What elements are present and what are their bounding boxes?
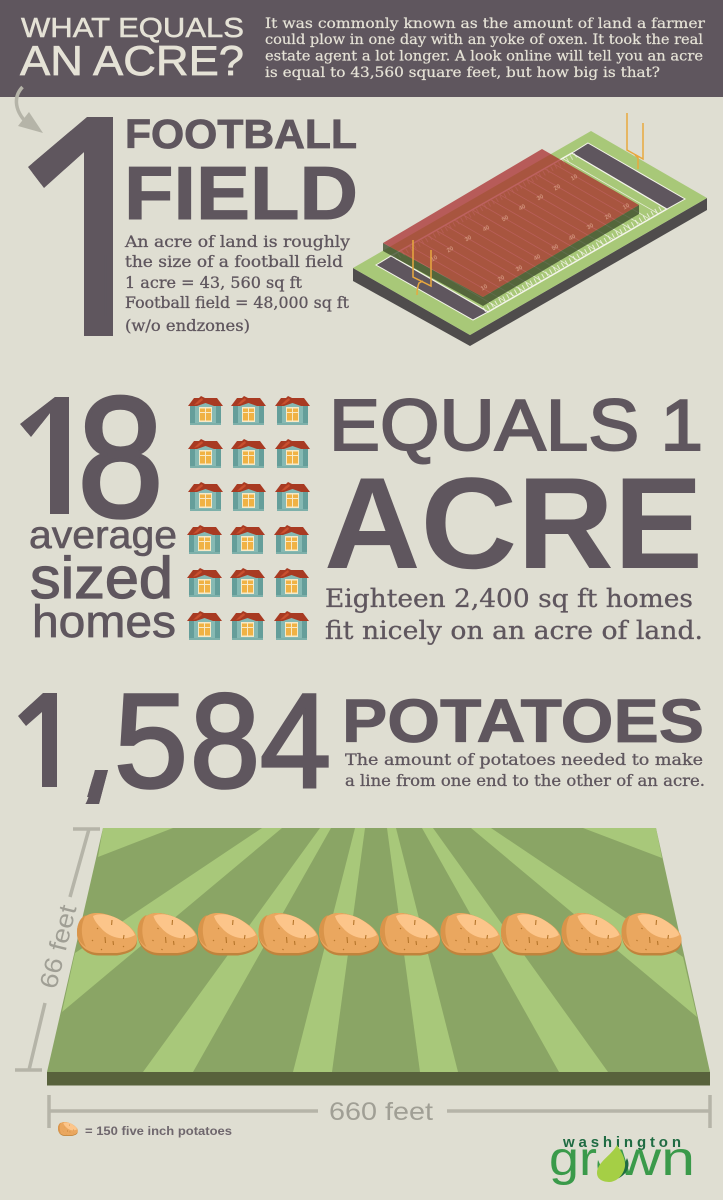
intro paragraph [265,16,706,81]
intro paragraph: is equal to 43,560 square feet, but how big is that? [265,65,660,81]
red acre overlay [383,149,639,306]
football field description [124,232,350,335]
big number 18: 1 [12,359,108,553]
dimension: 66 feet [15,829,100,1070]
football field description: Football field = 48,000 sq ft [125,293,350,312]
potatoes description: The amount of potatoes needed to make [345,751,703,769]
legend: potato key [58,1122,232,1138]
football field description: An acre of land is roughly [124,232,350,251]
big number 18: 8 [78,362,164,553]
yard numbers: 30 [515,265,524,273]
yard numbers: 30 [536,194,545,202]
illustration: crop field with stripes [47,828,710,1086]
heading: equals 1 acre: EQUALS 1 [329,386,703,466]
yard numbers: 40 [518,204,527,212]
yard numbers: 50 [551,244,560,252]
homes description [325,584,703,645]
heading: football field [124,111,358,235]
header band [0,0,723,97]
logo: washington grown: wn [616,1133,695,1186]
yard numbers: 10 [430,255,439,263]
label: average sized homes: homes [32,596,176,647]
intro paragraph: estate agent a lot longer. A look online will tell you an acre [265,48,703,64]
title: what equals an acre [20,12,244,84]
big number 1,584: 8 [190,667,260,816]
yard numbers: 30 [586,223,595,231]
potatoes description: a line from one end to the other of an acre. [345,772,705,790]
football field description: (w/o endzones) [125,316,250,335]
endzones [376,143,685,320]
logo: washington grown: gr [549,1133,597,1186]
yard numbers: 20 [553,184,562,192]
yard numbers: 10 [570,174,579,182]
title: what equals an acre: AN ACRE? [20,37,244,84]
yard numbers: 40 [568,234,577,242]
big number 18 [20,394,159,520]
dimension: 660 feet [49,1095,710,1128]
yard numbers [430,174,631,292]
big number 1,584 [18,692,329,804]
title: what equals an acre: WHAT EQUALS [21,12,244,43]
yard numbers: 40 [533,254,542,262]
logo: washington grown: washington [562,1134,681,1151]
yard numbers: 20 [604,213,613,221]
icon: leaf [597,1145,629,1182]
yard numbers: 30 [464,235,473,243]
intro paragraph: It was commonly known as the amount of land a farmer [265,16,706,32]
big number 1,584: 5 [114,667,188,816]
dimension: 660 feet: 660 feet [329,1098,433,1126]
big number 1: 1 [11,54,185,403]
label: average sized homes [29,514,177,647]
yard numbers: 20 [446,246,455,254]
logo: washington grown [549,1133,695,1186]
intro paragraph: could plow in one day with an yoke of oxen. It took the real [265,32,703,48]
homes description: fit nicely on an acre of land. [325,616,703,645]
heading: potatoes: POTATOES [342,687,704,755]
yard numbers: 20 [497,275,506,283]
heading: football field: FIELD [124,151,358,235]
potatoes description [345,751,705,790]
legend: potato key: = 150 five inch potatoes [85,1124,232,1138]
yard numbers: 40 [482,225,491,233]
yard numbers: 10 [622,203,631,211]
football field description: the size of a football field [125,252,343,271]
icon: curved arrow [16,87,43,133]
football field description: 1 acre = 43, 560 sq ft [125,273,303,292]
goal posts [413,113,643,295]
heading: equals 1 acre: ACRE [324,450,703,596]
big number 1,584: , [74,637,121,827]
label: average sized homes: sized [30,546,173,611]
big number 1,584: 1 [13,667,88,816]
row of ten potatoes [77,913,682,956]
big number 1,584: 4 [260,667,331,816]
yard numbers: 10 [480,284,489,292]
illustration: isometric football field [353,113,707,346]
yard numbers: 50 [501,215,510,223]
heading: football field: FOOTBALL [125,111,357,157]
dimension: 66 feet: 66 feet [35,902,82,991]
label: average sized homes: average [29,514,177,557]
heading: equals 1 acre [324,386,703,596]
icon grid: 18 houses [187,396,310,640]
homes description: Eighteen 2,400 sq ft homes [325,584,693,613]
